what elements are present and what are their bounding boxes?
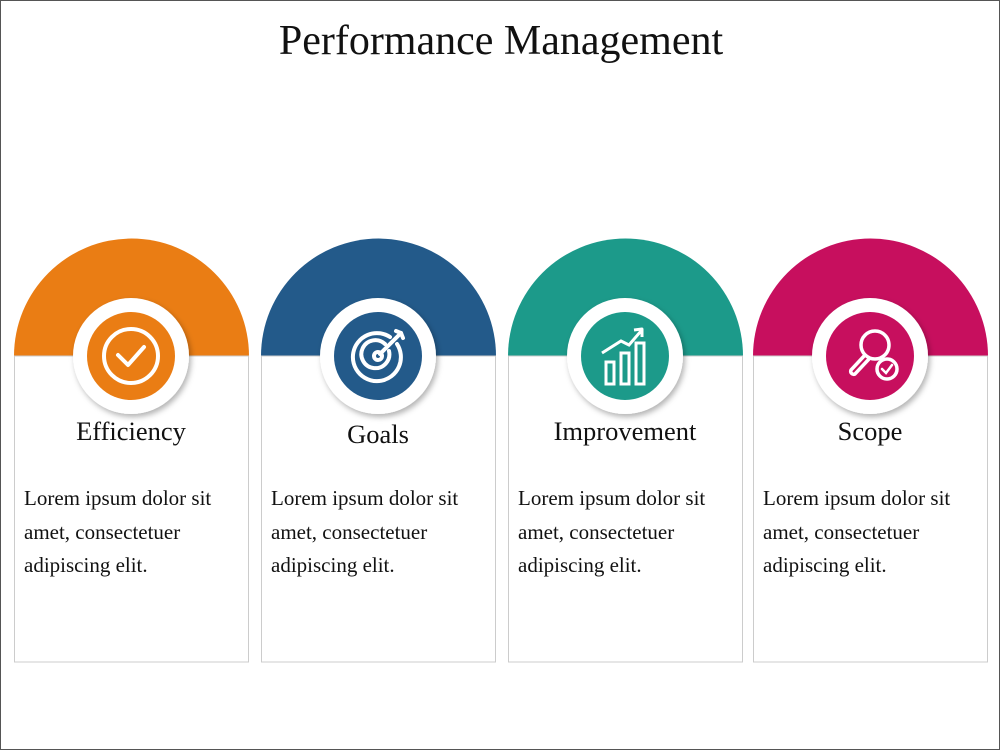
text: efficiency: adipiscing elit. [24,553,148,577]
text: goals: adipiscing elit. [271,553,395,577]
text: goals: amet, consectetuer [271,520,427,544]
panel: improvement [508,238,743,662]
text: improvement: Lorem ipsum dolor sit [518,486,705,510]
heading: Goals: Goals [347,419,409,449]
panel: scope [753,238,988,662]
text: goals: Lorem ipsum dolor sit [271,486,458,510]
icon: target [353,331,403,381]
text: improvement: amet, consectetuer [518,520,674,544]
text: scope: amet, consectetuer [763,520,919,544]
panel: goals [261,239,496,662]
panel: efficiency [14,239,249,662]
heading: Efficiency: Efficiency [76,416,187,446]
text: improvement: adipiscing elit. [518,553,642,577]
icon: growth chart [602,329,644,384]
text: efficiency: Lorem ipsum dolor sit [24,486,211,510]
text: efficiency: amet, consectetuer [24,520,180,544]
icon: check [104,329,158,383]
text: scope: Lorem ipsum dolor sit [763,486,950,510]
icon: magnifier check [851,331,897,379]
title: Performance Management [279,18,723,64]
text: scope: adipiscing elit. [763,553,887,577]
heading: Improvement: Improvement [554,416,697,446]
heading: Scope: Scope [838,416,902,446]
